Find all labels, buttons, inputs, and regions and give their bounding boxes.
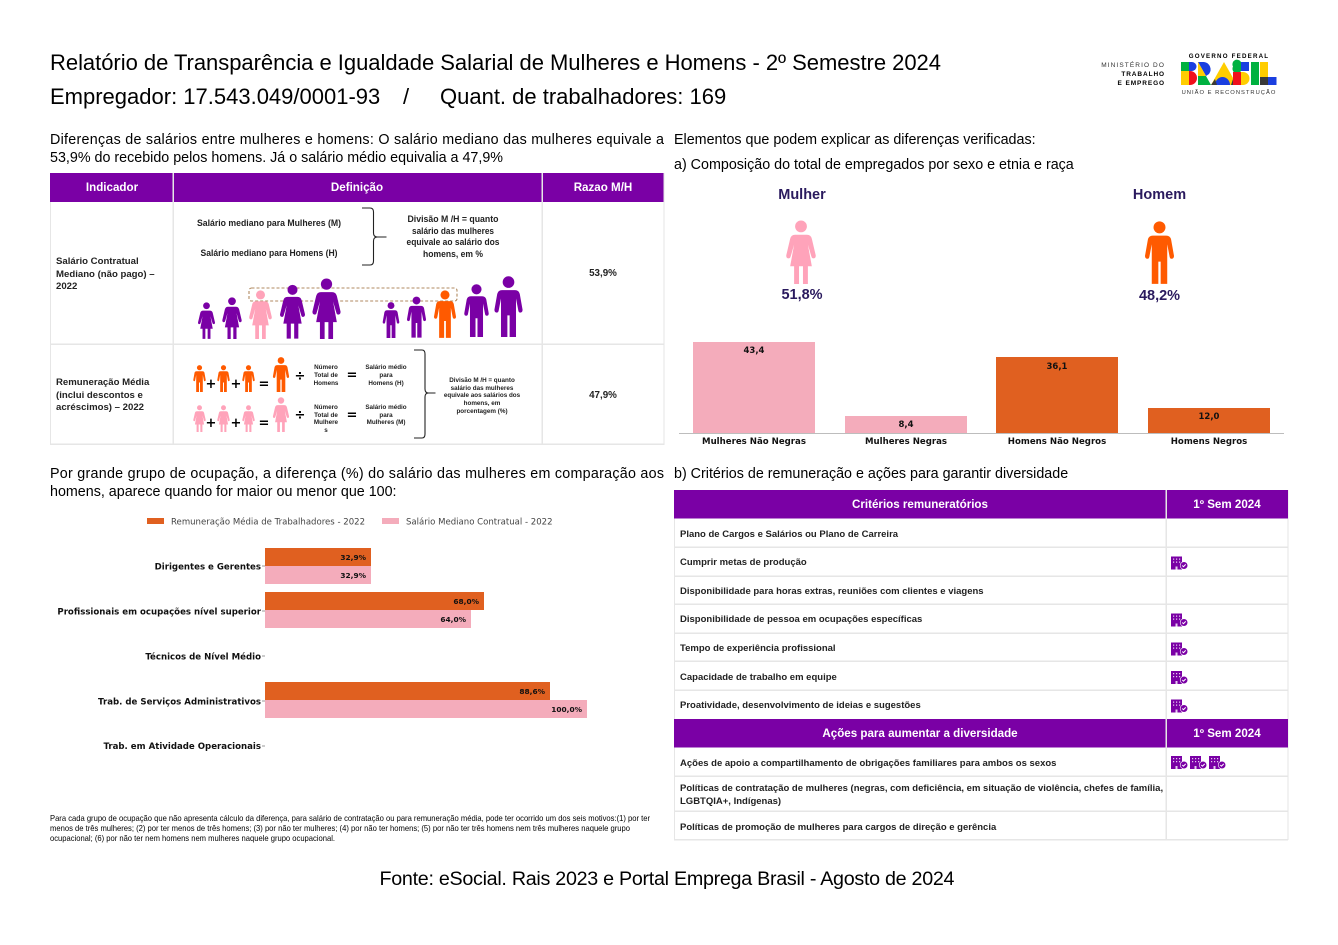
row: remuneração média: + <box>206 377 216 392</box>
logo: ministério e governo federal: GOVERNO FEDERAL <box>1189 53 1269 60</box>
header: ações para diversidade: 1º Sem 2024 <box>1193 727 1261 740</box>
intro text: diferenças de salários <box>50 132 664 166</box>
logo: ministério e governo federal: E EMPREGO <box>1118 80 1165 87</box>
row: remuneração média: ÷ <box>295 369 305 384</box>
row: salário contratual mediano: Mediano (não pago) – <box>56 269 155 280</box>
footnote: Para cada grupo de ocupação que não apresenta cálculo da diferença, para salário de contratação ou para remuneração média, pode ter ocorrido um dos seis motivos:(1) por ter <box>50 814 650 823</box>
rows: critérios: Plano de Cargos e Salários ou Plano de Carreira <box>680 529 899 540</box>
bar chart: composição por sexo e raça <box>679 342 1284 447</box>
rows: ações: Ações de apoio a compartilhamento de obrigações familiares para ambos os sexos <box>680 758 1056 769</box>
bar chart: diferença por ocupação <box>57 548 587 752</box>
heading: elementos explicativos <box>674 132 1074 173</box>
rows: critérios: Disponibilidade de pessoa em ocupações específicas <box>680 614 922 625</box>
chart legend: Remuneração Média de Trabalhadores - 2022 <box>171 516 365 528</box>
intro text: diferenças de salários: Diferenças de salários entre mulheres e homens: O salário mediano das mulheres equivale a <box>50 132 664 148</box>
table header: Definição <box>331 181 383 194</box>
table header: Razao M/H <box>574 181 632 194</box>
row: remuneração média: para <box>379 412 393 419</box>
row: remuneração média: Salário médio <box>365 364 407 371</box>
table header <box>50 173 664 202</box>
row: salário contratual mediano: salário das mulheres <box>412 226 494 236</box>
bar chart: composição por sexo e raça: Mulheres Não Negras <box>702 437 806 447</box>
row: remuneração média: Mulheres (M) <box>367 419 405 426</box>
row: remuneração média: Remuneração Média <box>56 377 150 388</box>
bar chart: composição por sexo e raça: 12,0 <box>1199 412 1220 422</box>
row: remuneração média: s <box>324 427 328 434</box>
rows: ações: Políticas de promoção de mulheres para cargos de direção e gerência <box>680 822 997 833</box>
header: ações para diversidade: Ações para aumentar a diversidade <box>822 727 1018 740</box>
row: salário contratual mediano: Divisão M /H = quanto <box>408 214 499 224</box>
row: remuneração média: ÷ <box>295 408 305 423</box>
bar chart: diferença por ocupação: Profissionais em ocupações nível superior <box>57 608 262 618</box>
row: salário contratual mediano: 53,9% <box>589 268 617 279</box>
heading: elementos explicativos: a) Composição do total de empregados por sexo e etnia e raça <box>674 157 1074 173</box>
bar chart: composição por sexo e raça: Homens Negros <box>1171 437 1247 447</box>
header: critérios remuneratórios: 1º Sem 2024 <box>1193 498 1261 511</box>
heading: grupo de ocupação: Por grande grupo de ocupação, a diferença (%) do salário das mulheres em comparação aos <box>50 466 664 482</box>
row: remuneração média: = <box>259 416 269 431</box>
logo: ministério e governo federal <box>1101 53 1276 96</box>
bar chart: composição por sexo e raça: 36,1 <box>1047 362 1068 372</box>
pictogram: mulher 51,8%: Mulher <box>778 187 826 203</box>
pictogram: homem 48,2% <box>1133 187 1186 304</box>
heading: grupo de ocupação <box>50 466 664 500</box>
bar chart: diferença por ocupação: 32,9% <box>340 553 367 562</box>
row: salário contratual mediano <box>56 208 617 339</box>
bar chart: composição por sexo e raça: 43,4 <box>744 346 765 356</box>
row: remuneração média <box>56 350 617 438</box>
source line: Fonte: eSocial. Rais 2023 e Portal Emprega Brasil - Agosto de 2024 <box>380 868 955 890</box>
row: remuneração média: 47,9% <box>589 390 617 401</box>
bar chart: diferença por ocupação: Técnicos de Nível Médio <box>145 652 261 662</box>
row: remuneração média: Homens <box>314 380 339 387</box>
row: remuneração média: Total de <box>314 372 338 379</box>
rows: critérios: Capacidade de trabalho em equipe <box>680 672 837 683</box>
row: remuneração média: = <box>347 408 357 423</box>
bar chart: diferença por ocupação: 100,0% <box>551 705 583 714</box>
bar chart: diferença por ocupação: Dirigentes e Gerentes <box>155 562 261 572</box>
row: remuneração média: Homens (H) <box>368 380 404 387</box>
row: remuneração média: acréscimos) – 2022 <box>56 402 144 413</box>
rows: ações: Políticas de contratação de mulheres (negras, com deficiência, em situação de violência, chefes de família, <box>680 783 1163 794</box>
row: remuneração média: Salário médio <box>365 404 407 411</box>
row: remuneração média: porcentagem (%) <box>456 408 508 415</box>
row: remuneração média: para <box>379 372 393 379</box>
row: remuneração média: homens, em <box>464 400 501 407</box>
header: critérios remuneratórios: Critérios remuneratórios <box>852 498 988 511</box>
row: remuneração média: Mulhere <box>314 419 339 426</box>
header: critérios remuneratórios <box>674 490 1288 518</box>
row: remuneração média: Total de <box>314 412 338 419</box>
title: Relatório de Transparência e Igualdade Salarial de Mulheres e Homens - 2º Semestre 2024 <box>50 50 941 75</box>
row: salário contratual mediano: Salário mediano para Mulheres (M) <box>197 218 341 228</box>
pictogram: mulher 51,8% <box>778 187 826 303</box>
row: salário contratual mediano: homens, em % <box>423 249 483 259</box>
header: ações para diversidade <box>674 719 1288 748</box>
rows: critérios: Cumprir metas de produção <box>680 557 807 568</box>
pictogram: homem 48,2%: Homem <box>1133 187 1186 203</box>
intro text: diferenças de salários: 53,9% do recebido pelos homens. Já o salário médio equivalia a 47,9% <box>50 150 503 166</box>
bar chart: composição por sexo e raça: Homens Não Negros <box>1008 437 1106 447</box>
bar chart: diferença por ocupação: Trab. de Serviços Administrativos <box>98 698 261 708</box>
heading: critérios de remuneração: b) Critérios de remuneração e ações para garantir diversidade <box>674 466 1068 482</box>
chart legend: Salário Mediano Contratual - 2022 <box>406 518 553 528</box>
title: Quant. de trabalhadores: 169 <box>440 84 726 109</box>
bar chart: composição por sexo e raça: 8,4 <box>898 420 914 430</box>
row: remuneração média: (inclui descontos e <box>56 390 143 401</box>
logo: ministério e governo federal: MINISTÉRIO DO <box>1101 60 1165 69</box>
rows: critérios: Disponibilidade para horas extras, reuniões com clientes e viagens <box>680 586 984 597</box>
row: salário contratual mediano: 2022 <box>56 281 77 292</box>
chart legend <box>147 516 553 528</box>
row: remuneração média: = <box>347 368 357 383</box>
footnote: menos de três mulheres; (2) por ter menos de três homens; (3) por não ter mulheres; (4) por não ter homens; (5) por não ter três homens nem três mulheres naquele grupo <box>50 824 631 833</box>
row: remuneração média: salário das mulheres <box>451 385 514 392</box>
row: remuneração média: + <box>206 416 216 431</box>
rows: ações: LGBTQIA+, Indígenas) <box>680 796 781 807</box>
rows: critérios <box>680 529 1188 712</box>
table header: Indicador <box>86 181 139 194</box>
rows: ações <box>680 756 1226 833</box>
footnote <box>50 814 650 843</box>
heading: grupo de ocupação: homens, aparece quando for maior ou menor que 100: <box>50 484 397 500</box>
row: remuneração média: Número <box>314 404 338 411</box>
bar chart: diferença por ocupação: 32,9% <box>340 571 367 580</box>
bar chart: diferença por ocupação: 88,6% <box>519 687 546 696</box>
bar chart: diferença por ocupação: 68,0% <box>453 597 480 606</box>
heading: elementos explicativos: Elementos que podem explicar as diferenças verificadas: <box>674 132 1036 148</box>
footnote: ocupacional; (6) por não ter nem homens nem mulheres naquele grupo ocupacional. <box>50 834 335 843</box>
row: salário contratual mediano: equivale ao salário dos <box>406 237 500 247</box>
row: remuneração média: Divisão M /H = quanto <box>449 377 515 384</box>
row: remuneração média: equivale aos salários dos <box>444 392 521 399</box>
row: salário contratual mediano: Salário mediano para Homens (H) <box>200 248 338 258</box>
title <box>50 50 941 109</box>
title: Empregador: 17.543.049/0001-93 <box>50 84 380 109</box>
row: remuneração média: + <box>231 377 241 392</box>
row: remuneração média: + <box>231 416 241 431</box>
title: / <box>403 84 410 109</box>
row: salário contratual mediano: Salário Contratual <box>56 256 139 267</box>
logo: ministério e governo federal: TRABALHO <box>1121 71 1165 78</box>
row: remuneração média: Número <box>314 364 338 371</box>
panel: tabela de indicadores <box>50 173 664 445</box>
panel: critérios e ações <box>674 490 1288 840</box>
pictogram: homem 48,2%: 48,2% <box>1139 288 1180 304</box>
row: remuneração média: = <box>259 377 269 392</box>
rows: critérios: Tempo de experiência profissional <box>680 643 836 654</box>
logo: ministério e governo federal: UNIÃO E RECONSTRUÇÃO <box>1182 89 1276 96</box>
bar chart: composição por sexo e raça: Mulheres Negras <box>865 437 947 447</box>
pictogram: mulher 51,8%: 51,8% <box>781 287 823 303</box>
rows: critérios: Proatividade, desenvolvimento de ideias e sugestões <box>680 700 921 711</box>
bar chart: diferença por ocupação: Trab. em Atividade Operacionais <box>103 742 261 752</box>
bar chart: diferença por ocupação: 64,0% <box>440 615 467 624</box>
